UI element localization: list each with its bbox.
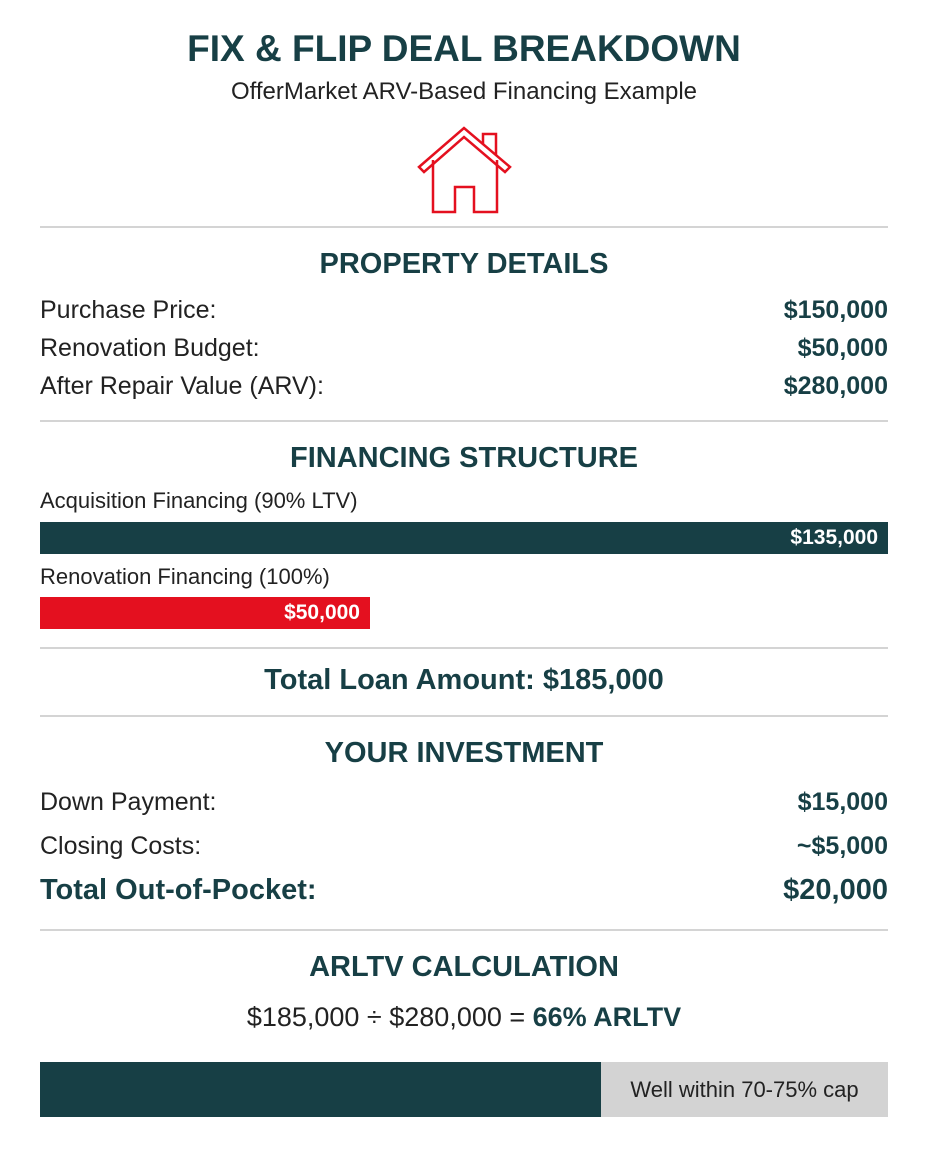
title: FIX & FLIP DEAL BREAKDOWN bbox=[187, 28, 741, 69]
bar: renovation financing: Renovation Financing (100%) bbox=[40, 564, 330, 589]
investment rows: Total Out-of-Pocket: bbox=[40, 874, 317, 906]
bar: renovation financing: $50,000 bbox=[284, 601, 360, 624]
investment rows: Down Payment: bbox=[40, 788, 216, 816]
bar: acquisition financing: Acquisition Financing (90% LTV) bbox=[40, 488, 358, 513]
property rows: After Repair Value (ARV): bbox=[40, 372, 324, 400]
property rows: Renovation Budget: bbox=[40, 334, 260, 362]
heading: your investment: YOUR INVESTMENT bbox=[325, 737, 603, 769]
heading: financing structure: FINANCING STRUCTURE bbox=[290, 442, 638, 474]
investment rows: $15,000 bbox=[798, 788, 888, 816]
investment rows: Closing Costs: bbox=[40, 832, 201, 860]
icon: house bbox=[417, 126, 512, 214]
bar: ARLTV gauge: Well within 70-75% cap bbox=[630, 1077, 859, 1102]
investment rows: $20,000 bbox=[783, 874, 888, 906]
formula: $185,000 ÷ $280,000 = 66% ARLTV bbox=[247, 1002, 681, 1032]
heading: arltv calculation: ARLTV CALCULATION bbox=[309, 951, 619, 983]
subtitle: OfferMarket ARV-Based Financing Example bbox=[231, 78, 697, 105]
property rows: $280,000 bbox=[784, 372, 888, 400]
property rows bbox=[40, 296, 888, 400]
bar: ARLTV gauge bbox=[40, 1062, 888, 1117]
bar: acquisition financing bbox=[40, 488, 888, 554]
bar: acquisition financing: $135,000 bbox=[790, 526, 878, 549]
investment rows bbox=[40, 788, 888, 906]
investment rows: ~$5,000 bbox=[797, 832, 888, 860]
total loan: Total Loan Amount: $185,000 bbox=[264, 664, 664, 696]
heading: property details: PROPERTY DETAILS bbox=[320, 248, 608, 280]
property rows: Purchase Price: bbox=[40, 296, 216, 324]
property rows: $50,000 bbox=[798, 334, 888, 362]
property rows: $150,000 bbox=[784, 296, 888, 324]
bar: renovation financing bbox=[40, 564, 370, 629]
